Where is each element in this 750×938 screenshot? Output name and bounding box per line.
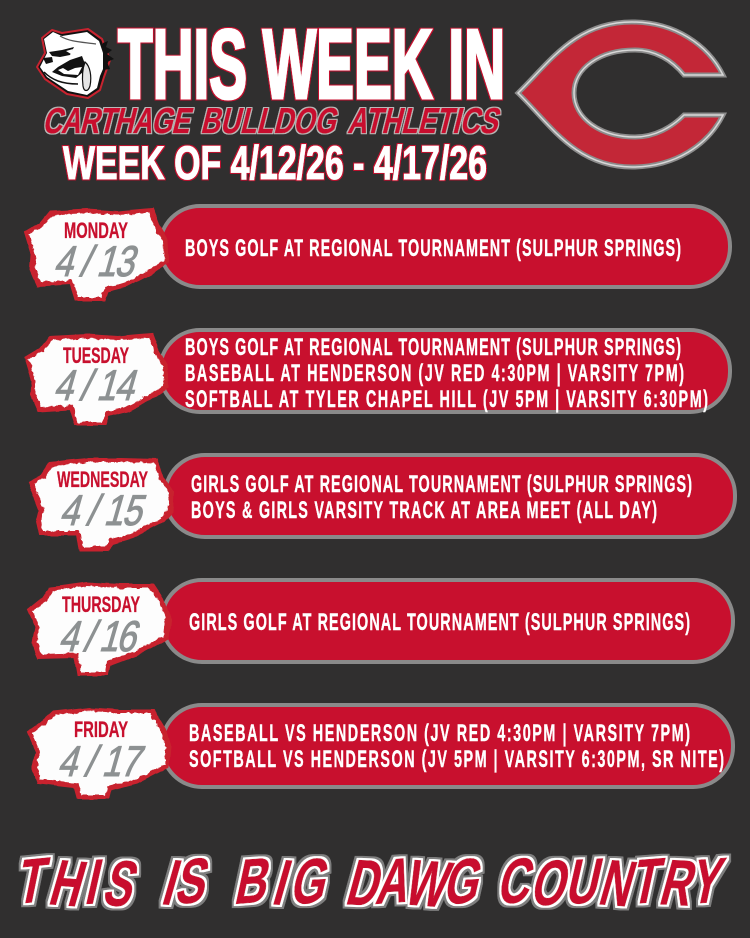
Tuesday events: SOFTBALL AT TYLER CHAPEL HILL (JV 5PM | VARSITY 6:30PM) <box>185 386 708 413</box>
panel: Tuesday <box>25 330 730 425</box>
subtitle: ATHLETICS <box>345 101 505 141</box>
Thursday date badge: 4 / 16 <box>55 613 146 661</box>
Friday events: SOFTBALL VS HENDERSON (JV 5PM | VARSITY 6:30PM, SR NITE) <box>189 746 724 773</box>
footer slogan: IS <box>156 843 218 919</box>
Tuesday date badge <box>25 334 168 425</box>
footer slogan: THIS <box>8 843 148 921</box>
Thursday date badge <box>28 583 170 675</box>
Wednesday date badge: 4 / 15 <box>56 487 151 535</box>
subtitle: BULLDOG <box>198 101 343 141</box>
footer slogan: BIG <box>227 843 338 919</box>
Tuesday date badge: 4 / 14 <box>50 362 144 410</box>
Thursday event pill <box>162 580 733 662</box>
icon: bulldog mascot <box>37 29 114 98</box>
Monday date badge: 4 / 13 <box>50 238 144 286</box>
Wednesday event pill <box>165 455 735 537</box>
footer slogan: DAWG <box>339 843 491 921</box>
Wednesday events: GIRLS GOLF AT REGIONAL TOURNAMENT (SULPHUR SPRINGS) <box>191 471 692 498</box>
panel: Thursday <box>28 580 733 675</box>
Tuesday events: BOYS GOLF AT REGIONAL TOURNAMENT (SULPHUR SPRINGS) <box>185 334 681 361</box>
panel: Friday <box>28 705 733 798</box>
Wednesday events <box>191 471 692 524</box>
subtitle <box>40 101 505 141</box>
Thursday events: GIRLS GOLF AT REGIONAL TOURNAMENT (SULPHUR SPRINGS) <box>189 609 690 636</box>
Friday date badge: 4 / 17 <box>54 738 149 786</box>
Monday date badge <box>25 209 168 300</box>
icon: red C logo <box>518 22 723 167</box>
subtitle: CARTHAGE <box>40 101 197 141</box>
Wednesday events: BOYS & GIRLS VARSITY TRACK AT AREA MEET (ALL DAY) <box>191 497 657 524</box>
Wednesday date badge: WEDNESDAY <box>57 467 148 492</box>
Monday date badge: MONDAY <box>64 218 128 243</box>
Tuesday event pill <box>160 330 730 412</box>
Tuesday date badge: TUESDAY <box>63 343 129 368</box>
Friday events <box>189 720 724 773</box>
footer slogan <box>8 843 733 921</box>
Tuesday events: BASEBALL AT HENDERSON (JV RED 4:30PM | VARSITY 7PM) <box>185 360 684 387</box>
Friday event pill <box>162 705 733 787</box>
Friday date badge: FRIDAY <box>74 717 128 742</box>
Wednesday date badge <box>29 459 173 550</box>
week date range: WEEK OF 4/12/26 - 4/17/26 <box>63 136 487 189</box>
Friday date badge <box>28 708 170 798</box>
panel: Wednesday <box>29 455 735 550</box>
footer slogan: COUNTRY <box>490 843 733 920</box>
Monday events: BOYS GOLF AT REGIONAL TOURNAMENT (SULPHUR SPRINGS) <box>185 235 681 262</box>
panel: Monday <box>25 206 730 300</box>
Friday events: BASEBALL VS HENDERSON (JV RED 4:30PM | VARSITY 7PM) <box>189 720 690 747</box>
Monday event pill <box>160 206 730 287</box>
Thursday date badge: THURSDAY <box>62 592 140 617</box>
Tuesday events <box>185 334 708 413</box>
